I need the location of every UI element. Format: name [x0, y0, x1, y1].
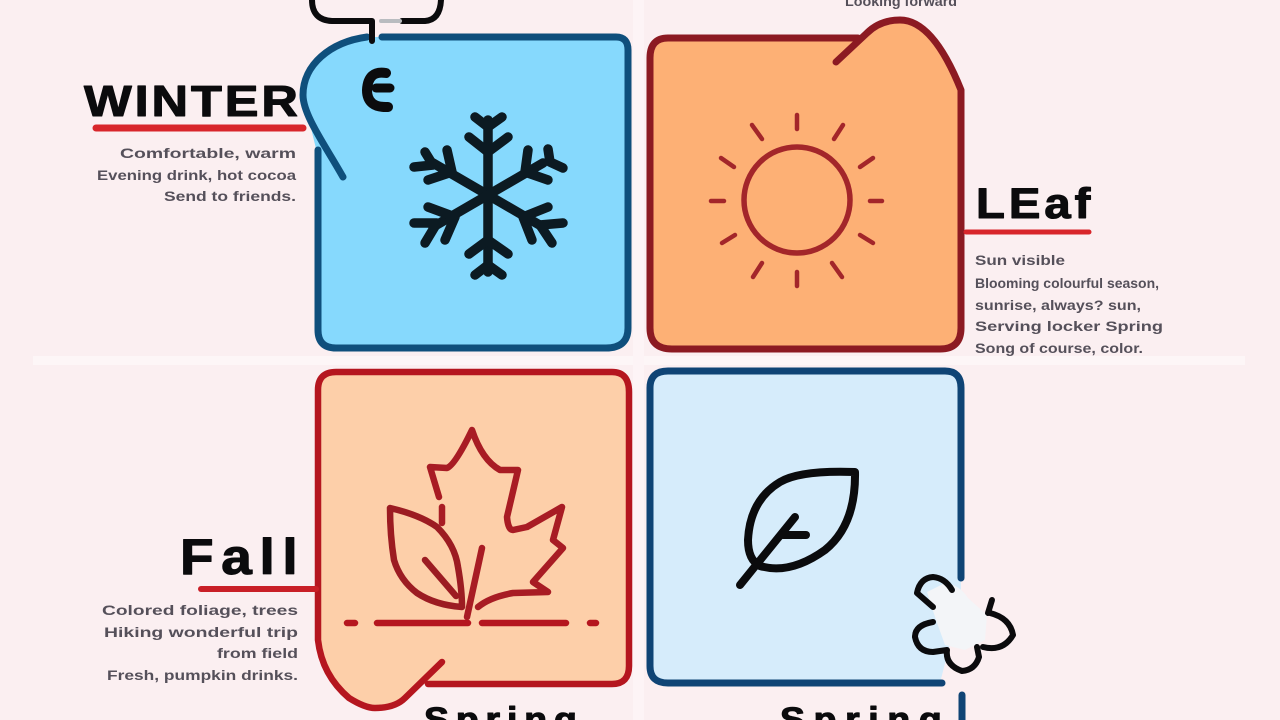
summer underline [966, 230, 1089, 234]
icon: small leaf [390, 508, 462, 607]
text block: summer: Song of course, color. [975, 340, 1143, 356]
text block: winter: Evening drink, hot cocoa [97, 167, 296, 183]
text block: summer: Sun visible [975, 252, 1065, 268]
icon: flower [915, 577, 1013, 671]
fall underline [201, 586, 316, 592]
text block: fall: from field [217, 645, 298, 661]
text block: summer: Serving locker Spring [975, 318, 1163, 334]
text block: winter [97, 145, 296, 204]
text block: fall: Fresh, pumpkin drinks. [107, 667, 298, 683]
icon: hanging hook [312, 0, 441, 41]
text block: fall: Colored foliage, trees [102, 602, 298, 618]
text block: fall: Hiking wonderful trip [104, 624, 298, 640]
heading: winter: WINTER [84, 77, 298, 126]
panel: summer [650, 20, 961, 349]
icon: snowflake [414, 117, 563, 275]
heading: fall: Fall [180, 529, 298, 585]
icon: small glyph [367, 73, 390, 107]
text block: summer: sunrise, always? sun, [975, 297, 1141, 313]
ground line [347, 620, 596, 626]
winter underline [96, 124, 303, 132]
text block: winter: Comfortable, warm [120, 145, 296, 161]
text block: summer: Blooming colourful season, [975, 275, 1159, 291]
text block: fall [102, 602, 298, 683]
panel: spring [650, 371, 1013, 720]
text block: winter: Send to friends. [164, 188, 296, 204]
heading: summer: LEaf [976, 179, 1091, 228]
panel: winter [303, 0, 628, 348]
icon: leaf [740, 472, 855, 585]
text block: summer [975, 252, 1163, 356]
panel: fall [318, 372, 629, 708]
icon: sun [711, 115, 882, 286]
icon: maple leaf [430, 430, 563, 617]
